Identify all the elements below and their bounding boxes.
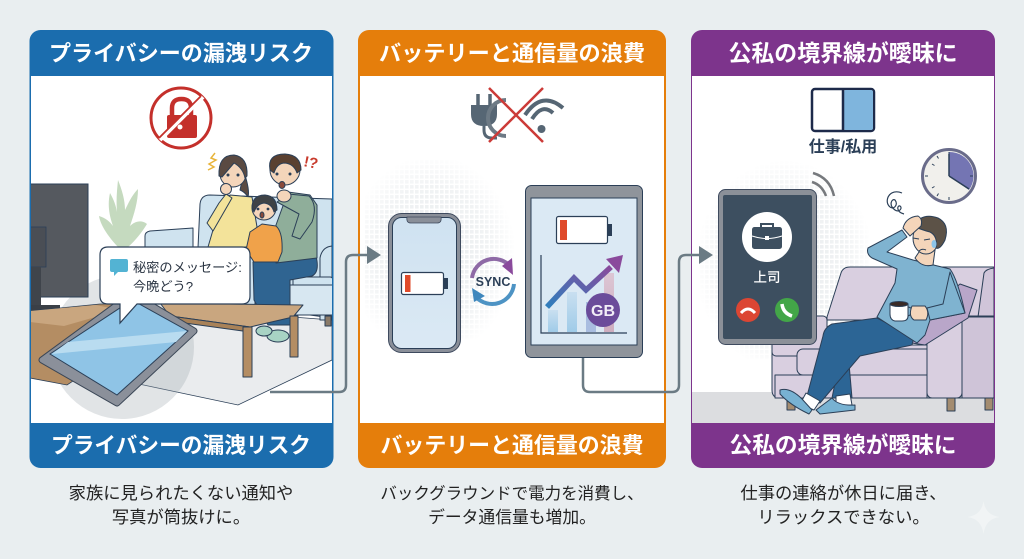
- icon: signal waves: [812, 173, 834, 196]
- neck and face: [915, 246, 935, 266]
- phone: [388, 214, 460, 352]
- button: accept: [775, 298, 799, 322]
- dizzy swirl: [887, 192, 904, 214]
- panel: work-life boundary: [691, 30, 995, 468]
- man: [780, 216, 965, 414]
- heading: privacy top: プライバシーの漏洩リスク: [49, 41, 313, 66]
- hand on head: [903, 216, 922, 236]
- panel: battery and data: [358, 30, 666, 468]
- label: work private: 仕事/私用: [809, 137, 877, 156]
- illustration: family and tablet: [30, 153, 333, 419]
- text: battery description: バックグラウンドで電力を消費し、: [380, 484, 644, 503]
- TV: [30, 184, 88, 314]
- sweater: [868, 230, 965, 343]
- shadow circle: [50, 275, 194, 419]
- phone: incoming call: [718, 190, 816, 344]
- text: boundary description: [740, 483, 947, 527]
- battery: tablet: [556, 216, 612, 244]
- tablet: data usage: [526, 186, 642, 358]
- text: boundary description: 仕事の連絡が休日に届き、: [740, 483, 947, 503]
- text: privacy description: [69, 483, 293, 527]
- chart: rising data: [541, 255, 627, 333]
- icon: chat: [110, 259, 128, 276]
- text: battery description: データ通信量も増加。: [428, 507, 596, 527]
- icon: sync: [472, 258, 514, 304]
- icon: split work private: [809, 89, 877, 156]
- TV cabinet: [31, 304, 112, 386]
- man: [253, 154, 317, 342]
- icon: sync: SYNC: [476, 275, 510, 289]
- text: boundary description: リラックスできない。: [757, 507, 930, 527]
- icon: no lock: [151, 88, 211, 148]
- woman: [207, 155, 257, 247]
- text: privacy description: 家族に見られたくない通知や: [69, 483, 293, 503]
- coffee table: [160, 303, 303, 377]
- rug: [142, 317, 332, 406]
- heading: privacy bottom: [30, 423, 333, 468]
- sofa: [772, 267, 994, 411]
- decoration: sparkle: [968, 501, 1000, 534]
- icon: clock: [922, 150, 976, 202]
- heading: battery top: バッテリーと通信量の浪費: [379, 41, 645, 66]
- chart: rising data: GB: [591, 303, 615, 320]
- sofa: [145, 195, 333, 326]
- icon: briefcase: [752, 224, 782, 249]
- text: privacy description: 写真が筒抜けに。: [112, 507, 250, 527]
- heading: battery bottom: バッテリーと通信量の浪費: [380, 433, 644, 458]
- callout: secret message: [100, 247, 250, 323]
- arrow: battery to boundary: [583, 246, 713, 392]
- tablet: [42, 294, 194, 403]
- floor: [692, 392, 994, 423]
- coffee cup: [890, 304, 908, 321]
- button: decline: [736, 298, 760, 322]
- back leg: [832, 368, 852, 398]
- child: [246, 195, 282, 262]
- text: battery description: [380, 484, 644, 527]
- icon: plug and wifi crossed: [471, 88, 563, 142]
- heading: privacy bottom: プライバシーの漏洩リスク: [51, 433, 311, 458]
- callout: secret message: 秘密のメッセージ:: [133, 260, 242, 275]
- illustration: tired man on sofa: [692, 192, 994, 423]
- socks and slippers: [800, 393, 820, 410]
- battery: phone: [402, 272, 448, 294]
- panel: privacy risk: [30, 30, 334, 468]
- surprise marks: !?: [302, 153, 320, 173]
- callout: secret message: 今晩どう?: [133, 279, 193, 294]
- plant: [99, 180, 147, 247]
- label: boss: 上司: [754, 270, 780, 285]
- arrow: privacy to battery: [270, 246, 381, 392]
- surprise marks: [208, 153, 320, 173]
- heading: boundary top: 公私の境界線が曖昧に: [728, 40, 958, 66]
- front leg: [807, 318, 914, 403]
- heading: boundary bottom: 公私の境界線が曖昧に: [730, 432, 956, 458]
